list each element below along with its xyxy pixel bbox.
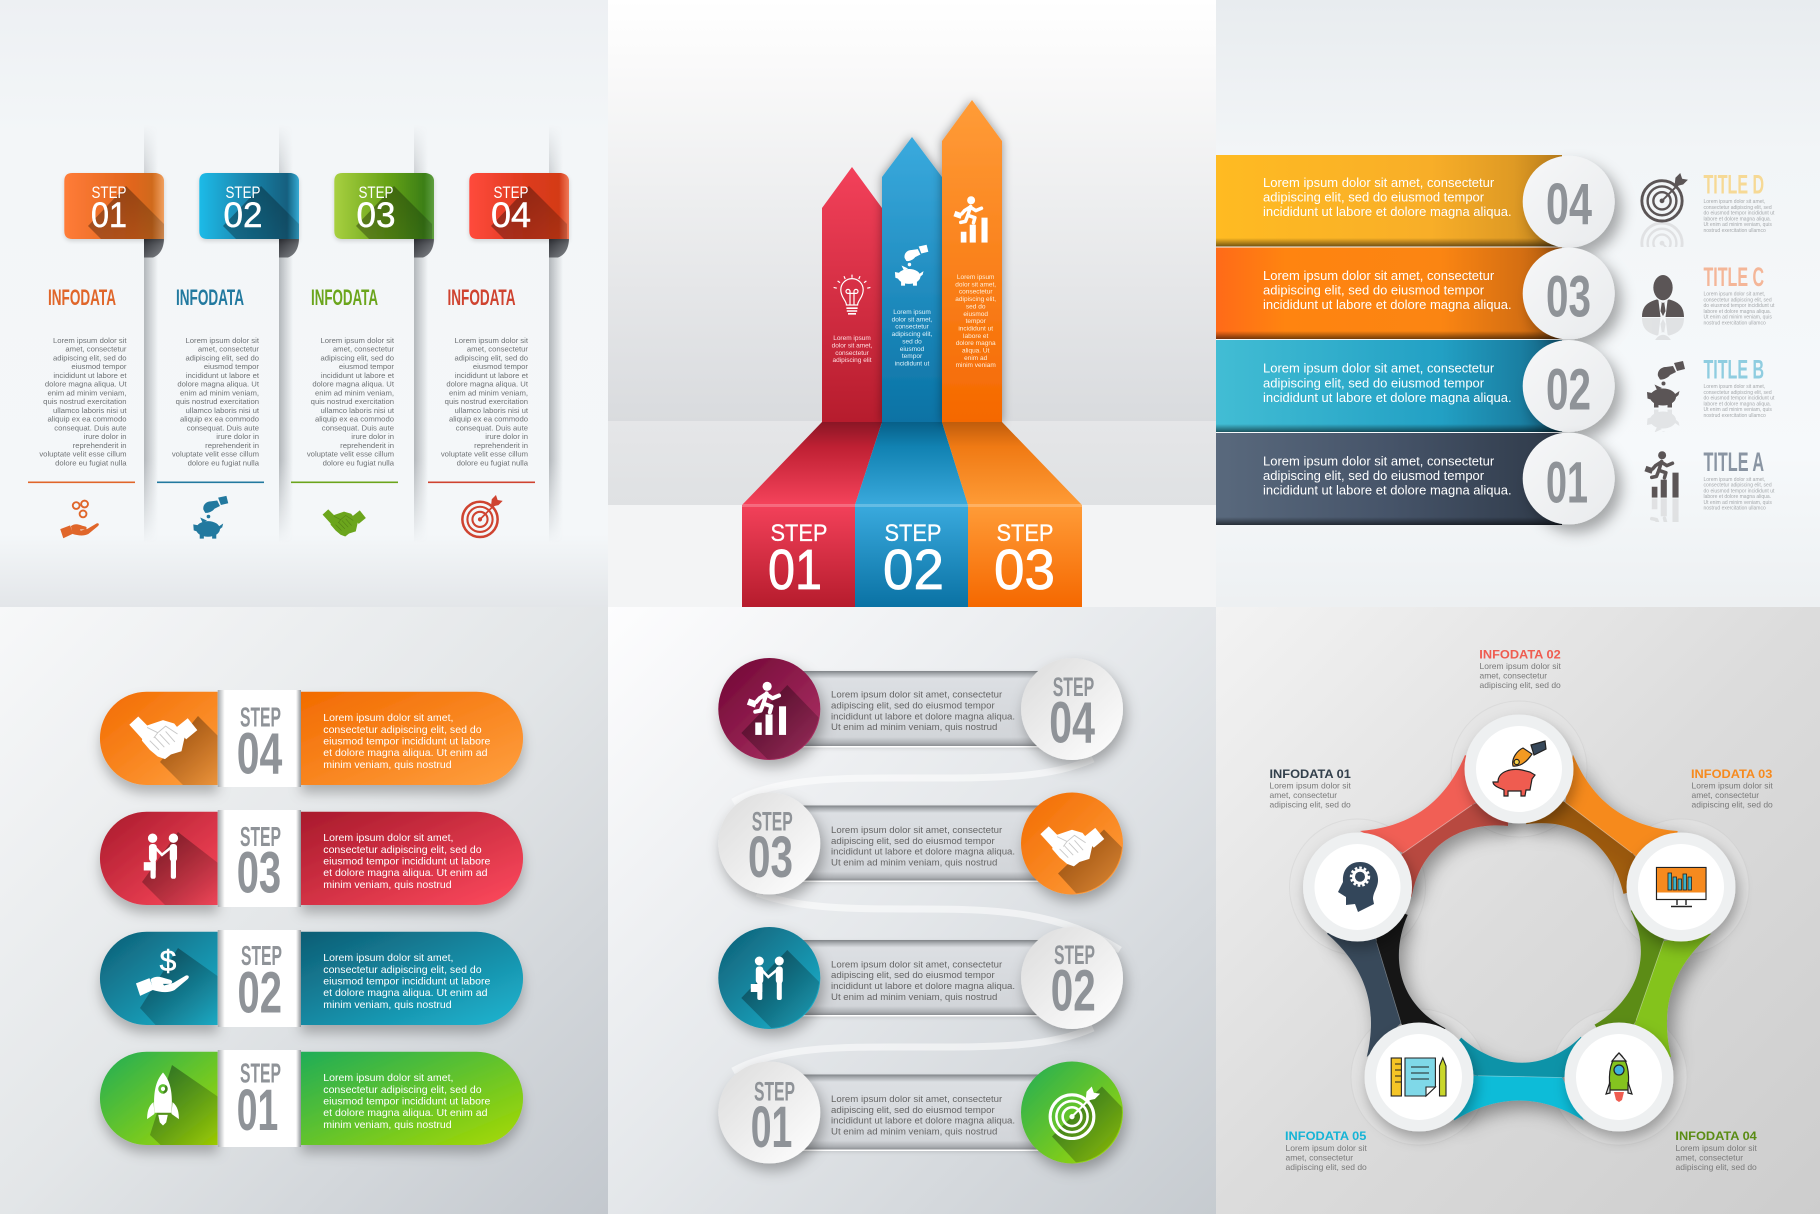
arrow text red: adipiscing elit xyxy=(832,357,872,364)
pill step 02: et dolore magna aliqua. Ut enim ad xyxy=(323,987,488,999)
arrow: step 01 red xyxy=(742,167,882,607)
column text 4: adipiscing elit, sed do xyxy=(454,353,528,362)
row 02: 02 xyxy=(1051,959,1096,1024)
arrow text blue: dolor sit amet, xyxy=(892,316,933,323)
node: head with gear xyxy=(1303,832,1412,942)
arrow text blue: Lorem ipsum xyxy=(893,309,931,316)
column text 4: enim ad minim veniam, xyxy=(449,388,528,397)
column text 3: dolore magna aliqua. Ut xyxy=(312,380,395,389)
column text 1: reprehenderit in xyxy=(73,441,126,450)
pill step 04: STEP xyxy=(240,702,281,733)
pill step 02: Lorem ipsum dolor sit amet, xyxy=(323,952,453,964)
row 02 xyxy=(718,927,1123,1056)
node: piggy bank xyxy=(1464,714,1574,824)
label INFODATA 01: adipiscing elit, sed do xyxy=(1270,800,1351,810)
title D block xyxy=(1704,169,1775,234)
column heading 1: INFODATA xyxy=(48,285,116,310)
pill step 01: minim veniam, quis nostrud xyxy=(323,1119,452,1131)
pill step 04: eiusmod tempor incididunt ut labore xyxy=(323,736,491,748)
column text 4: amet, consectetur xyxy=(467,345,528,354)
arrow text orange: minim veniam xyxy=(956,362,996,369)
band 01: Lorem ipsum dolor sit amet, consectetur xyxy=(1263,453,1495,468)
column text 3: consequat. Duis aute xyxy=(322,423,394,432)
title A block: labore et dolore magna aliqua. xyxy=(1704,494,1771,500)
icon: light bulb xyxy=(834,275,870,314)
arrow text blue: adipiscing elit, xyxy=(892,331,933,338)
band 01 xyxy=(1216,433,1562,525)
column text 3: amet, consectetur xyxy=(333,345,394,354)
pill step 01: et dolore magna aliqua. Ut enim ad xyxy=(323,1107,488,1119)
pill step 01: Lorem ipsum dolor sit amet, xyxy=(323,1072,453,1084)
pill step 03: et dolore magna aliqua. Ut enim ad xyxy=(323,867,488,879)
icon: runner on bars xyxy=(1644,451,1679,522)
pill step 04: consectetur adipiscing elit, sed do xyxy=(323,724,482,736)
label INFODATA 04: Lorem ipsum dolor sit xyxy=(1676,1143,1757,1153)
column text 2: irure dolor in xyxy=(216,432,259,441)
row 01: STEP xyxy=(754,1076,795,1106)
column text 4: dolore magna aliqua. Ut xyxy=(446,380,529,389)
column text 1: enim ad minim veniam, xyxy=(47,388,126,397)
pill step 01 xyxy=(100,1050,523,1152)
band 01: adipiscing elit, sed do eiusmod tempor xyxy=(1263,468,1485,483)
icon: piggy bank xyxy=(193,496,228,539)
step 03 label: 03 xyxy=(994,538,1055,602)
step badge 01: STEP xyxy=(92,184,126,202)
step badge 03: 03 xyxy=(356,196,396,235)
column text 2: adipiscing elit, sed do xyxy=(185,353,259,362)
number circle 02 xyxy=(1523,340,1615,432)
arrow text orange: dolor sit amet, xyxy=(955,281,996,288)
icon: piggy bank xyxy=(895,245,928,286)
pill step 03: eiusmod tempor incididunt ut labore xyxy=(323,856,491,868)
column text 1: eiusmod tempor xyxy=(71,362,127,371)
icon: target xyxy=(1640,173,1688,247)
node: rocket xyxy=(1564,1022,1674,1132)
row 01: Lorem ipsum dolor sit amet, consectetur xyxy=(831,1094,1003,1105)
label INFODATA 02: Lorem ipsum dolor sit xyxy=(1480,661,1561,671)
node: monitor xyxy=(1626,832,1736,942)
arrow text blue: sed do xyxy=(902,338,922,345)
pill step 04: Lorem ipsum dolor sit amet, xyxy=(323,712,453,724)
step badge 03: STEP xyxy=(358,184,394,202)
icon: hand with gears xyxy=(60,501,99,538)
number circle 04: 04 xyxy=(1546,172,1592,237)
title A block: do eiusmod tempor incididunt ut xyxy=(1704,488,1775,494)
column text 2: Lorem ipsum dolor sit xyxy=(186,336,260,345)
panel: pill steps xyxy=(0,607,608,1214)
step badge 04 xyxy=(469,173,589,286)
column text 1: adipiscing elit, sed do xyxy=(53,353,126,362)
row 04: 04 xyxy=(1049,690,1095,755)
arrow text orange: labore et xyxy=(963,333,989,340)
label INFODATA 03: Lorem ipsum dolor sit xyxy=(1692,780,1773,790)
column text 1: dolore eu fugiat nulla xyxy=(55,458,127,467)
pill step 03: 03 xyxy=(237,841,281,906)
column text 2: dolore eu fugiat nulla xyxy=(188,458,260,467)
row 03 xyxy=(714,792,1134,909)
pill step 03: consectetur adipiscing elit, sed do xyxy=(323,844,482,856)
panel: horizontal bands with numbered circles xyxy=(1216,0,1820,607)
arrow text orange: eiusmod xyxy=(963,311,988,318)
title B block: nostrud exercitation ullamco xyxy=(1704,413,1766,419)
column text 4: incididunt ut labore et xyxy=(455,371,529,380)
white connecting swooshes xyxy=(733,759,1120,1071)
step badge 03 xyxy=(334,173,454,286)
title B block: Lorem ipsum dolor sit amet, xyxy=(1704,384,1765,390)
label INFODATA 04: amet, consectetur xyxy=(1676,1152,1743,1162)
column text 1: Lorem ipsum dolor sit xyxy=(53,336,127,345)
title A block: consectetur adipiscing elit, sed xyxy=(1704,483,1772,489)
pill step 03: minim veniam, quis nostrud xyxy=(323,879,452,891)
column text 3: voluptate velit esse cillum xyxy=(307,450,394,459)
label INFODATA 05: amet, consectetur xyxy=(1286,1152,1353,1162)
title D block: Ut enim ad minim veniam, quis xyxy=(1704,222,1772,228)
band 02 xyxy=(1216,340,1562,432)
row 04: STEP xyxy=(1053,672,1094,702)
row 01: Ut enim ad minim veniam, quis nostrud xyxy=(831,1126,997,1137)
pill step 04: 04 xyxy=(237,721,283,786)
row 04: adipiscing elit, sed do eiusmod tempor xyxy=(831,700,996,712)
step badge 01 xyxy=(64,173,186,286)
step badge 02: STEP xyxy=(226,184,260,202)
band 03: Lorem ipsum dolor sit amet, consectetur xyxy=(1263,268,1495,283)
column text 2: aliquip ex ea commodo xyxy=(180,415,259,424)
column text 1: quis nostrud exercitation xyxy=(43,397,126,406)
panel: vertical step columns xyxy=(0,0,608,607)
arrow text red: consectetur xyxy=(835,350,870,357)
pill step 03: Lorem ipsum dolor sit amet, xyxy=(323,832,453,844)
column text 3: eiusmod tempor xyxy=(339,362,394,371)
label INFODATA 02: amet, consectetur xyxy=(1480,671,1547,681)
pill step 02: consectetur adipiscing elit, sed do xyxy=(323,964,482,976)
pill step 04: et dolore magna aliqua. Ut enim ad xyxy=(323,747,488,759)
arrow text orange: dolore magna xyxy=(956,340,996,347)
column text 3: enim ad minim veniam, xyxy=(315,388,394,397)
arrow: step 02 blue xyxy=(855,137,968,607)
band 04: Lorem ipsum dolor sit amet, consectetur xyxy=(1263,175,1495,190)
pill step 04 xyxy=(100,690,523,792)
column text 4: ullamco laboris nisi ut xyxy=(454,406,529,415)
row 04: incididunt ut labore et dolore magna aliqua. xyxy=(831,711,1015,722)
pill step 02 xyxy=(100,930,523,1032)
row 04: Ut enim ad minim veniam, quis nostrud xyxy=(831,722,997,733)
pill step 01: STEP xyxy=(240,1058,281,1089)
title D block: consectetur adipiscing elit, sed xyxy=(1704,205,1772,211)
panel: connected circle steps xyxy=(608,607,1216,1214)
column text 1: irure dolor in xyxy=(84,432,126,441)
column text 2: amet, consectetur xyxy=(198,345,259,354)
band 04: incididunt ut labore et dolore magna aliqua. xyxy=(1263,204,1512,219)
pill step 01: 01 xyxy=(237,1078,278,1143)
column text 3: incididunt ut labore et xyxy=(321,371,395,380)
label INFODATA 05: adipiscing elit, sed do xyxy=(1286,1162,1367,1172)
row 03: 03 xyxy=(748,825,793,890)
label INFODATA 04: adipiscing elit, sed do xyxy=(1676,1162,1757,1172)
column text 1: aliquip ex ea commodo xyxy=(47,415,126,424)
title A block: Ut enim ad minim veniam, quis xyxy=(1704,500,1772,506)
row 03: STEP xyxy=(752,807,793,837)
panel: pentagon cycle xyxy=(1216,607,1820,1214)
band 04 xyxy=(1216,155,1562,246)
icon: businessman xyxy=(1642,275,1684,340)
column text 2: enim ad minim veniam, xyxy=(180,388,259,397)
step 02 label: 02 xyxy=(883,538,944,602)
column text 3: aliquip ex ea commodo xyxy=(315,415,394,424)
step 03 label: STEP xyxy=(996,520,1054,547)
arrow: step 03 orange xyxy=(942,100,1082,607)
number circle 04 xyxy=(1523,156,1615,248)
number circle 01: 01 xyxy=(1546,450,1588,515)
row 03: incididunt ut labore et dolore magna aliqua. xyxy=(831,847,1015,858)
connector green xyxy=(1551,880,1756,1083)
row 04: Lorem ipsum dolor sit amet, consectetur xyxy=(831,690,1003,701)
step badge 04: 04 xyxy=(491,196,531,235)
title A block: nostrud exercitation ullamco xyxy=(1704,506,1766,512)
connector red xyxy=(1360,755,1510,897)
column text 4: reprehenderit in xyxy=(474,441,528,450)
pill step 02: STEP xyxy=(241,940,282,971)
title D block: Lorem ipsum dolor sit amet, xyxy=(1704,199,1765,205)
column text 4: dolore eu fugiat nulla xyxy=(457,458,529,467)
column text 4: aliquip ex ea commodo xyxy=(449,415,528,424)
row 03: adipiscing elit, sed do eiusmod tempor xyxy=(831,836,996,847)
column text 2: ullamco laboris nisi ut xyxy=(186,406,260,415)
band 02: Lorem ipsum dolor sit amet, consectetur xyxy=(1263,361,1495,376)
title C block xyxy=(1704,262,1775,326)
number circle 01 xyxy=(1523,432,1615,524)
title D block: TITLE D xyxy=(1704,169,1764,199)
label INFODATA 02 xyxy=(1479,650,1561,690)
step badge 01: 01 xyxy=(91,196,127,235)
pill step 02: 02 xyxy=(238,960,282,1025)
label INFODATA 02: adipiscing elit, sed do xyxy=(1480,680,1561,690)
column text 3: quis nostrud exercitation xyxy=(311,397,394,406)
pill step 03 xyxy=(100,810,523,912)
step badge 02: 02 xyxy=(224,196,262,235)
node: ruler note pencil xyxy=(1364,1022,1474,1132)
label INFODATA 03: amet, consectetur xyxy=(1692,790,1759,800)
title C block: TITLE C xyxy=(1704,262,1764,292)
title D block: do eiusmod tempor incididunt ut xyxy=(1704,210,1775,216)
band 03 xyxy=(1216,248,1562,339)
label INFODATA 05: INFODATA 05 xyxy=(1285,1131,1367,1143)
row 02: incididunt ut labore et dolore magna aliqua. xyxy=(831,981,1015,992)
title C block: consectetur adipiscing elit, sed xyxy=(1704,297,1772,303)
column text 2: reprehenderit in xyxy=(205,441,259,450)
arrow text red: Lorem ipsum xyxy=(833,335,871,342)
title C block: Ut enim ad minim veniam, quis xyxy=(1704,315,1772,321)
title D block: labore et dolore magna aliqua. xyxy=(1704,216,1771,222)
arrow text blue: eiusmod xyxy=(900,346,925,353)
column text 4: consequat. Duis aute xyxy=(456,423,528,432)
column text 2: dolore magna aliqua. Ut xyxy=(177,380,260,389)
column text 1: amet, consectetur xyxy=(65,345,127,354)
column text 1: consequat. Duis aute xyxy=(54,423,126,432)
step 01 label: STEP xyxy=(770,520,828,547)
title C block: labore et dolore magna aliqua. xyxy=(1704,309,1771,315)
row 04 xyxy=(718,658,1123,787)
panel: rising arrows xyxy=(608,0,1216,607)
row 02: Ut enim ad minim veniam, quis nostrud xyxy=(831,992,997,1003)
row 02: adipiscing elit, sed do eiusmod tempor xyxy=(831,970,996,981)
row 01 xyxy=(714,1061,1133,1178)
label INFODATA 01: amet, consectetur xyxy=(1270,790,1337,800)
connectors ring xyxy=(1294,731,1756,1182)
connector slate xyxy=(1294,891,1476,1078)
arrow text blue: incididunt ut xyxy=(895,360,930,367)
column text 3: reprehenderit in xyxy=(340,441,394,450)
column text 1: dolore magna aliqua. Ut xyxy=(45,380,127,389)
arrow text orange: enim ad xyxy=(964,355,988,362)
column heading 3: INFODATA xyxy=(311,285,378,310)
label INFODATA 01: INFODATA 01 xyxy=(1270,769,1352,781)
label INFODATA 03: adipiscing elit, sed do xyxy=(1692,800,1773,810)
column text 3: irure dolor in xyxy=(351,432,394,441)
title C block: nostrud exercitation ullamco xyxy=(1704,320,1766,326)
row 01: 01 xyxy=(751,1095,792,1160)
label INFODATA 01: Lorem ipsum dolor sit xyxy=(1270,780,1351,790)
row 01: adipiscing elit, sed do eiusmod tempor xyxy=(831,1105,996,1116)
label INFODATA 05: Lorem ipsum dolor sit xyxy=(1286,1143,1367,1153)
column text 4: eiusmod tempor xyxy=(473,362,528,371)
label INFODATA 03 xyxy=(1691,769,1773,810)
title C block: do eiusmod tempor incididunt ut xyxy=(1704,303,1775,309)
number circle 03: 03 xyxy=(1546,265,1591,330)
column heading 2: INFODATA xyxy=(176,285,244,310)
title B block: do eiusmod tempor incididunt ut xyxy=(1704,396,1775,402)
label INFODATA 02: INFODATA 02 xyxy=(1479,650,1561,662)
arrow text orange: adipiscing elit, xyxy=(955,296,996,303)
pill step 03: STEP xyxy=(240,821,281,852)
band 02: incididunt ut labore et dolore magna aliqua. xyxy=(1263,390,1512,405)
step 01 label: 01 xyxy=(768,538,822,602)
icon: target xyxy=(462,495,503,537)
column text 4: voluptate velit esse cillum xyxy=(441,450,528,459)
column text 4: Lorem ipsum dolor sit xyxy=(454,336,529,345)
icon: handshake xyxy=(323,509,366,536)
label INFODATA 04 xyxy=(1675,1131,1757,1172)
column text 3: Lorem ipsum dolor sit xyxy=(320,336,395,345)
label INFODATA 01 xyxy=(1270,769,1352,810)
number circle 02: 02 xyxy=(1546,357,1591,422)
column text 1: voluptate velit esse cillum xyxy=(39,450,126,459)
column text 2: consequat. Duis aute xyxy=(187,423,259,432)
row 03: Ut enim ad minim veniam, quis nostrud xyxy=(831,857,997,868)
column text 2: incididunt ut labore et xyxy=(186,371,260,380)
column text 2: voluptate velit esse cillum xyxy=(172,450,259,459)
title C block: Lorem ipsum dolor sit amet, xyxy=(1704,292,1765,298)
pill step 02: minim veniam, quis nostrud xyxy=(323,999,452,1011)
connector orange xyxy=(1510,731,1692,918)
pill step 01: consectetur adipiscing elit, sed do xyxy=(323,1084,482,1096)
column text 1: incididunt ut labore et xyxy=(53,371,127,380)
pill step 01: eiusmod tempor incididunt ut labore xyxy=(323,1096,491,1108)
number circle 03 xyxy=(1523,248,1615,340)
title B block: TITLE B xyxy=(1704,354,1764,384)
arrow text orange: aliqua. Ut xyxy=(962,348,990,354)
title B block: Ut enim ad minim veniam, quis xyxy=(1704,407,1772,413)
label INFODATA 04: INFODATA 04 xyxy=(1675,1131,1757,1143)
connector teal xyxy=(1418,979,1623,1182)
column text 4: irure dolor in xyxy=(485,432,528,441)
icon: piggy bank xyxy=(1647,361,1685,432)
arrow text red: dolor sit amet, xyxy=(832,342,873,349)
arrow text orange: incididunt ut xyxy=(958,325,993,332)
column text 4: quis nostrud exercitation xyxy=(445,397,528,406)
title A block: Lorem ipsum dolor sit amet, xyxy=(1704,477,1765,483)
column text 3: adipiscing elit, sed do xyxy=(320,353,394,362)
title D block: nostrud exercitation ullamco xyxy=(1704,228,1766,234)
row 01: incididunt ut labore et dolore magna aliqua. xyxy=(831,1116,1015,1127)
label INFODATA 03: INFODATA 03 xyxy=(1691,769,1772,781)
circle halos xyxy=(1290,701,1749,1145)
pill step 02: $ xyxy=(160,945,177,978)
arrow text orange: Lorem ipsum xyxy=(957,274,994,281)
arrow text orange: tempor xyxy=(966,318,987,325)
pill step 02: eiusmod tempor incididunt ut labore xyxy=(323,976,491,988)
row 03: Lorem ipsum dolor sit amet, consectetur xyxy=(831,825,1003,836)
pill step 04: minim veniam, quis nostrud xyxy=(323,759,452,771)
step 02 label: STEP xyxy=(884,520,942,547)
column text 2: eiusmod tempor xyxy=(204,362,259,371)
arrow text orange: sed do xyxy=(966,303,986,310)
title A block xyxy=(1704,447,1775,512)
label INFODATA 05 xyxy=(1285,1131,1367,1172)
band 03: adipiscing elit, sed do eiusmod tempor xyxy=(1263,283,1485,298)
band 01: incididunt ut labore et dolore magna aliqua. xyxy=(1263,482,1512,498)
column heading 4: INFODATA xyxy=(448,285,516,310)
arrow text blue: consectetur xyxy=(895,324,930,331)
step badge 02 xyxy=(199,173,321,286)
column text 3: dolore eu fugiat nulla xyxy=(323,458,395,467)
arrow text blue: tempor xyxy=(902,353,923,360)
title B block: labore et dolore magna aliqua. xyxy=(1704,401,1771,407)
column text 2: quis nostrud exercitation xyxy=(176,397,259,406)
band 02: adipiscing elit, sed do eiusmod tempor xyxy=(1263,375,1485,390)
row 02: STEP xyxy=(1054,940,1095,970)
band 04: adipiscing elit, sed do eiusmod tempor xyxy=(1263,190,1485,205)
step badge 04: STEP xyxy=(494,184,528,202)
arrow text orange: consectetur xyxy=(959,289,993,296)
title B block xyxy=(1704,354,1775,419)
title B block: consectetur adipiscing elit, sed xyxy=(1704,390,1772,396)
title A block: TITLE A xyxy=(1704,447,1764,477)
band 03: incididunt ut labore et dolore magna aliqua. xyxy=(1263,297,1512,312)
row 02: Lorem ipsum dolor sit amet, consectetur xyxy=(831,959,1003,970)
column text 1: ullamco laboris nisi ut xyxy=(53,406,127,415)
icon: runner on bars xyxy=(953,196,988,243)
column text 3: ullamco laboris nisi ut xyxy=(320,406,395,415)
